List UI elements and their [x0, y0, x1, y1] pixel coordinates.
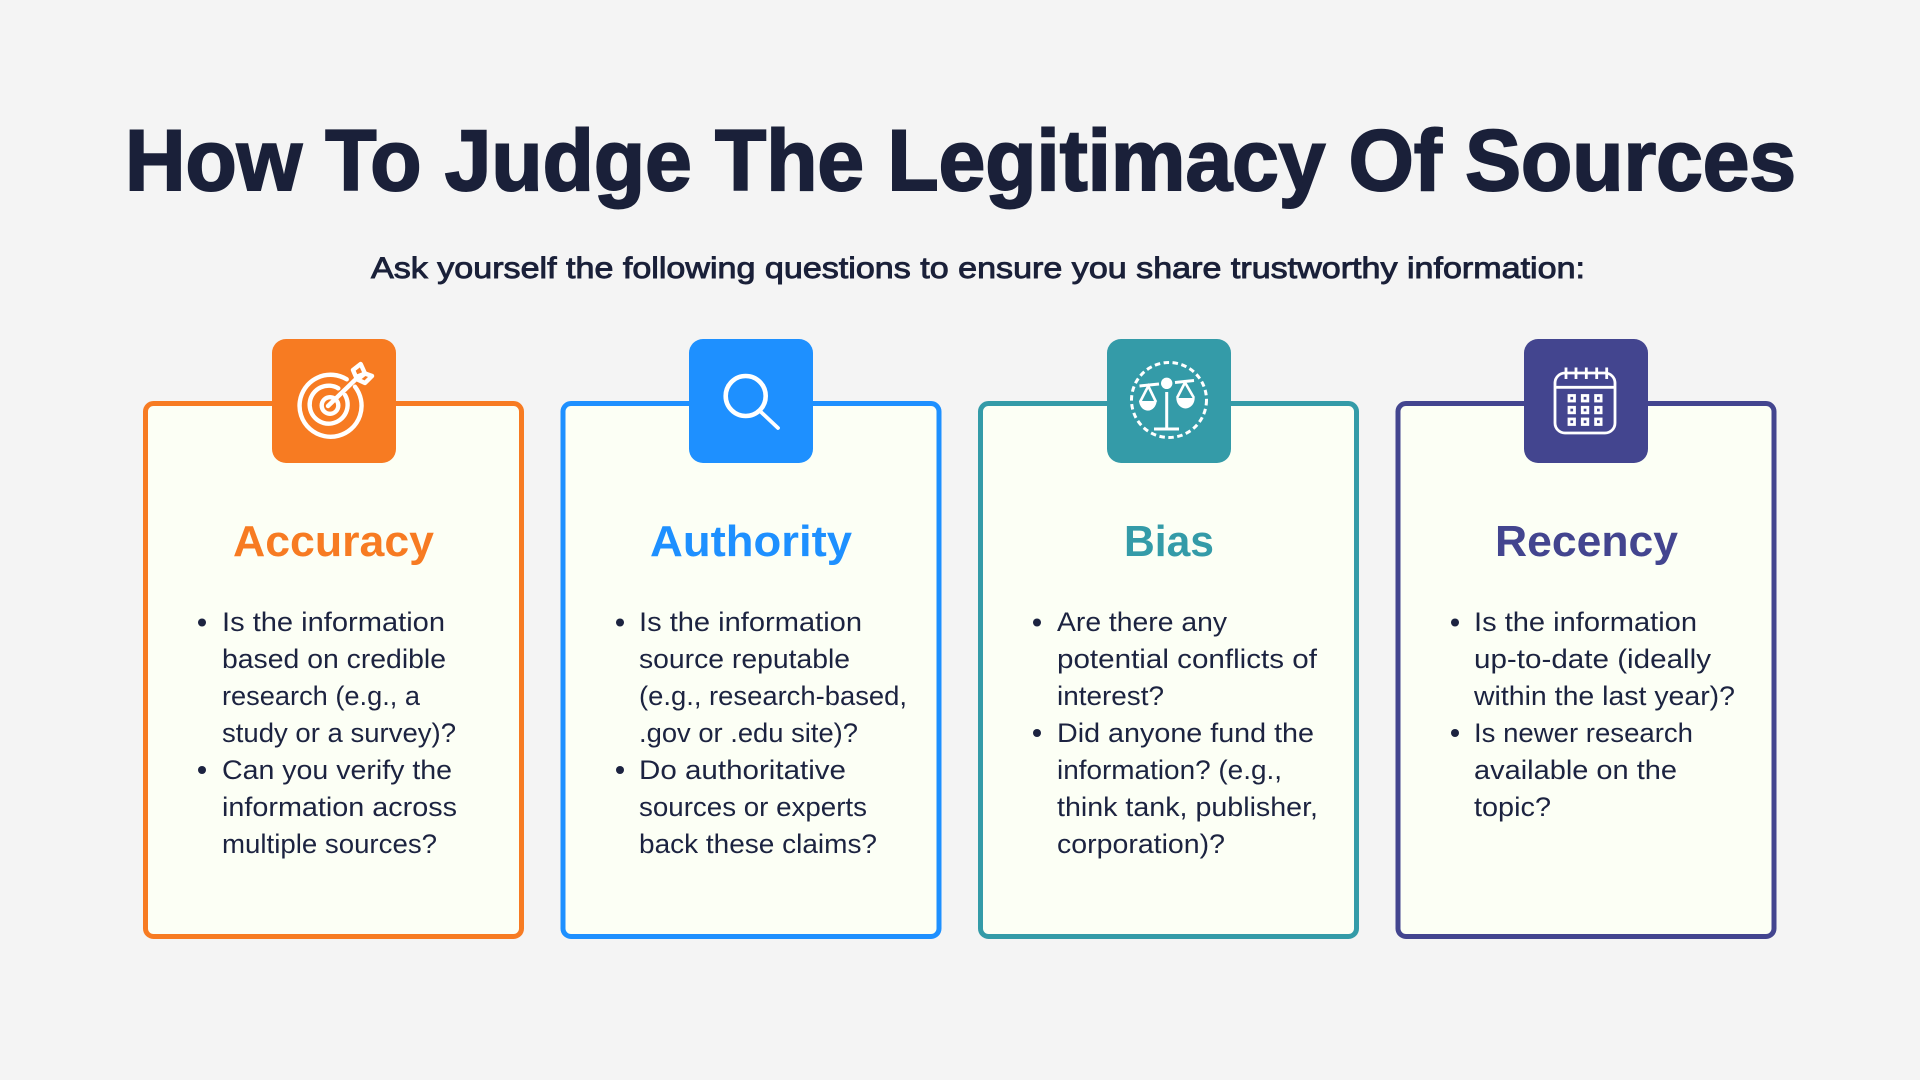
bullet list: bias questions: potential conflicts of	[1057, 644, 1318, 674]
title: How To Judge The Legitimacy Of Sources	[125, 113, 1796, 209]
bullet list: authority questions: sources or experts	[639, 792, 867, 822]
heading: Recency: Recency	[1495, 517, 1679, 566]
bullet list: accuracy questions	[198, 607, 457, 859]
bullet list: bias questions: information? (e.g.,	[1057, 755, 1282, 785]
bullet list: recency questions	[1451, 607, 1735, 822]
bullet list: bias questions	[1033, 607, 1318, 859]
panel: accuracy	[146, 339, 522, 936]
bullet list: bias questions: interest?	[1057, 681, 1164, 711]
bullet list: recency questions: topic?	[1474, 792, 1551, 822]
subtitle: Ask yourself the following questions to ensure you share trustworthy information:	[371, 252, 1585, 285]
bullet list: bias questions: Did anyone fund the	[1057, 718, 1314, 748]
bullet list: bias questions: Are there any	[1057, 607, 1228, 637]
bullet list: authority questions: .gov or .edu site)?	[639, 718, 858, 748]
bullet list: accuracy questions: study or a survey)?	[222, 718, 456, 748]
bullet list: authority questions: Is the information	[639, 607, 862, 637]
bullet list: accuracy questions: information across	[222, 792, 457, 822]
bullet list: authority questions: source reputable	[639, 644, 850, 674]
panel: authority	[563, 339, 939, 936]
heading: Bias: Bias	[1124, 517, 1214, 566]
bullet list: bias questions: corporation)?	[1057, 829, 1225, 859]
panel: recency	[1398, 339, 1774, 936]
bullet list: accuracy questions: research (e.g., a	[222, 681, 421, 711]
heading: Accuracy: Accuracy	[233, 517, 435, 566]
bullet list: accuracy questions: Is the information	[222, 607, 445, 637]
bullet list: recency questions: Is newer research	[1474, 718, 1693, 748]
bullet list: recency questions: up-to-date (ideally	[1474, 644, 1712, 674]
bullet list: recency questions: available on the	[1474, 755, 1677, 785]
bullet list: accuracy questions: based on credible	[222, 644, 446, 674]
bullet list: accuracy questions: multiple sources?	[222, 829, 437, 859]
bullet list: bias questions: think tank, publisher,	[1057, 792, 1318, 822]
bullet list: authority questions: (e.g., research-based,	[639, 681, 907, 711]
icon: scales	[1107, 339, 1231, 463]
bullet list: authority questions: Do authoritative	[639, 755, 846, 785]
bullet list: recency questions: Is the information	[1474, 607, 1697, 637]
heading: Authority: Authority	[650, 517, 853, 566]
icon: target	[272, 339, 396, 463]
bullet list: authority questions	[616, 607, 907, 859]
icon: magnifying glass	[689, 339, 813, 463]
panel: bias	[980, 339, 1356, 936]
bullet list: accuracy questions: Can you verify the	[222, 755, 452, 785]
icon: calendar	[1524, 339, 1648, 463]
bullet list: recency questions: within the last year)?	[1473, 681, 1735, 711]
bullet list: authority questions: back these claims?	[639, 829, 877, 859]
